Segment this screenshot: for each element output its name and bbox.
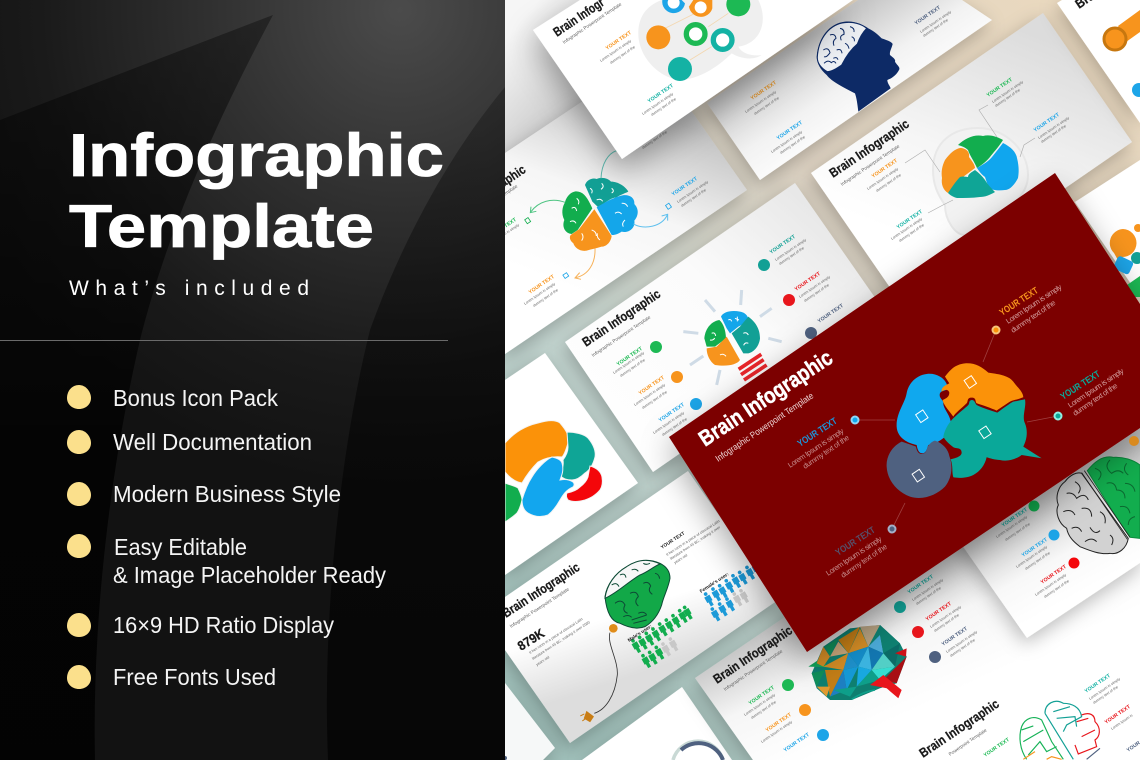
dot: navy bbox=[888, 526, 896, 532]
slide: lightbulb brain: dummy text of the bbox=[641, 390, 668, 410]
slide: puzzle brain in head: Lorem Ipsum is simply bbox=[890, 217, 923, 241]
slide: polygon brain and circuit brain: Infographic Powerpoint Template bbox=[723, 648, 784, 693]
node 02 left bbox=[646, 25, 670, 49]
slide: brain bubble: dummy text of the bbox=[609, 45, 636, 65]
slide: brain bubble: YOUR TEXT bbox=[605, 30, 633, 52]
slide: polygon brain and circuit brain: Lorem Ipsum is simply bbox=[911, 578, 944, 602]
slide: gray and green brain: dummy text of the bbox=[1004, 522, 1031, 542]
subtitle: What’s included bbox=[69, 277, 309, 300]
node top right bbox=[726, 0, 750, 16]
icon: four-piece brain bbox=[942, 135, 1019, 198]
slide: polygon brain and circuit brain: Lorem Ipsum is simply bbox=[1088, 677, 1121, 701]
slide: polygon brain and circuit brain: Lorem Ipsum is bbox=[1110, 713, 1134, 731]
slide: lightbulb brain: YOUR TEXT bbox=[638, 375, 666, 397]
slide: 879K users bbox=[499, 471, 778, 743]
slide: brain bubble bbox=[533, 0, 853, 159]
slide: lightbulb brain: Lorem Ipsum is simply bbox=[612, 351, 645, 375]
backdrop behind slides bbox=[505, 0, 1140, 760]
slide: puzzle brain in head: dummy text of the bbox=[994, 88, 1021, 108]
slide: puzzle brain in head: dummy text of the bbox=[875, 173, 902, 193]
piece: orange bbox=[942, 363, 1023, 417]
piece: navy bbox=[887, 441, 951, 498]
slide: 879K users: Infographic Powerpoint Template bbox=[509, 586, 571, 630]
slide: left/right brain with arrows: dummy text of the bbox=[680, 188, 707, 208]
list item: Bonus Icon Pack: Bonus Icon Pack bbox=[113, 385, 278, 411]
list item: Free Fonts Used: Free Fonts Used bbox=[113, 664, 276, 690]
slide: head silhouette: dummy text of the bbox=[753, 96, 780, 116]
slide: polygon brain and circuit brain: dummy text of the bbox=[1092, 685, 1119, 705]
title: Template bbox=[69, 193, 374, 260]
slide: lightbulb brain: Lorem Ipsum is simply bbox=[798, 275, 831, 299]
slide: puzzle brain in head: Lorem Ipsum is simply bbox=[1037, 116, 1070, 140]
slide: polygon brain and circuit brain: YOUR TEXT bbox=[783, 732, 811, 754]
icon: lightbulb brain bbox=[683, 290, 782, 385]
slide: left/right brain with arrows: dummy text of the bbox=[641, 130, 668, 150]
slide: puzzle brain in head: dummy text of the bbox=[898, 223, 925, 243]
slide: brain bubble: Infographic Powerpoint Template bbox=[562, 1, 623, 46]
node 04 bbox=[713, 31, 732, 49]
slide: head silhouette: Lorem Ipsum is simply bbox=[919, 10, 952, 34]
slide: top right orange bbox=[1057, 0, 1140, 123]
slide: top left blank bbox=[505, 0, 640, 165]
slide: left/right brain with arrows: YOUR TEXT bbox=[528, 274, 556, 296]
slide: lightbulb brain: Lorem Ipsum is simply bbox=[633, 383, 666, 407]
slide: puzzle brain in head: Lorem Ipsum is simply bbox=[866, 167, 899, 191]
slide: puzzle brain in head bbox=[811, 13, 1132, 302]
slide: polygon brain and circuit brain bbox=[695, 505, 1140, 760]
slide: left/right brain with arrows: Infographic Powerpoint Template bbox=[458, 183, 519, 228]
piece: teal bbox=[943, 399, 1042, 478]
icon: circuit brain bbox=[1020, 701, 1100, 759]
panel: red feature slide bbox=[669, 173, 1140, 652]
slide: polygon brain and circuit brain: Lorem Ipsum is simply bbox=[945, 630, 978, 654]
panel: dark sidebar bbox=[0, 0, 505, 760]
list item: Easy Editable: Easy Editable bbox=[114, 534, 247, 560]
slide: puzzle brain in head: Brain Infographic bbox=[826, 116, 912, 180]
slide: bottom left strip bbox=[503, 683, 555, 760]
slide: 879K users: years old bbox=[535, 655, 550, 667]
slide: gray and green brain: Lorem Ipsum is simply bbox=[1015, 545, 1048, 569]
title bbox=[69, 122, 444, 260]
slide: head silhouette: YOUR TEXT bbox=[750, 80, 778, 102]
slide: polygon brain and circuit brain: YOUR TEXT bbox=[941, 626, 969, 648]
slide: 879K users: Brain Infographic bbox=[499, 559, 582, 621]
slide: puzzle brain in head: YOUR TEXT bbox=[896, 209, 924, 231]
slide: polygon brain and circuit brain: YOUR TEXT bbox=[907, 574, 935, 596]
title: Infographic bbox=[69, 122, 444, 189]
slide: brain bubble: YOUR TEXT bbox=[647, 83, 675, 105]
slide: head silhouette: Lorem Ipsum is simply bbox=[744, 90, 777, 114]
slide: head silhouette: dummy text of the bbox=[779, 135, 806, 155]
slide: left/right brain with arrows: Lorem Ipsum is simply bbox=[523, 282, 556, 306]
slide: brain bubble: Lorem Ipsum is simply bbox=[641, 92, 674, 116]
slide: polygon brain and circuit brain: YOUR TEXT bbox=[1104, 704, 1132, 726]
node 05 bottom bbox=[668, 57, 692, 81]
slide: 879K users: literature from 45 BC, making it over 2000 bbox=[531, 620, 591, 661]
slide: head silhouette bbox=[707, 0, 992, 180]
arrow: blue bbox=[633, 214, 668, 227]
icon: coloured brain lobes bbox=[505, 421, 602, 522]
slide: left/right brain with arrows bbox=[445, 55, 747, 354]
icon: navy head with brain bbox=[817, 22, 899, 112]
node 03 bbox=[686, 25, 705, 43]
arrow: orange bbox=[575, 248, 595, 279]
slide: lightbulb brain: Infographic Powerpoint Template bbox=[591, 314, 652, 359]
slide: left/right brain with arrows: Lorem Ipsum is simply bbox=[487, 223, 520, 247]
slide: brain bubble: dummy text of the bbox=[650, 97, 677, 117]
slide: polygon brain and circuit brain: YOUR TEXT bbox=[765, 712, 793, 734]
slide: gray and green brain: YOUR TEXT bbox=[1021, 537, 1049, 559]
icon: male users bbox=[629, 604, 694, 669]
slide: lightbulb brain: Brain Infographic bbox=[579, 286, 663, 349]
slide: gray and green brain: YOUR TEXT bbox=[1001, 507, 1029, 529]
slide: puzzle brain in head: YOUR TEXT bbox=[986, 77, 1014, 99]
pale head outline bbox=[933, 128, 1028, 235]
slide: polygon brain and circuit brain: dummy text of the bbox=[915, 586, 942, 606]
icon: female users bbox=[702, 560, 762, 622]
slide: 879K users: years old bbox=[673, 553, 688, 565]
slide: lightbulb brain: YOUR TEXT bbox=[769, 234, 797, 256]
slide: gray and green brain: YOUR TEXT bbox=[1040, 564, 1068, 586]
icon: four-colour brain bbox=[525, 151, 671, 279]
label: blue: Lorem Ipsum is simply bbox=[786, 426, 846, 470]
icon: half-filled brain and plug bbox=[580, 560, 670, 722]
slide: gray and green brain: Lorem Ipsum is simply bbox=[1034, 573, 1067, 597]
slide: gray and green brain: dummy text of the bbox=[1024, 551, 1051, 571]
slide: lightbulb brain: YOUR TEXT bbox=[658, 402, 686, 424]
slide: puzzle brain in head: Infographic Powerpoint Template bbox=[840, 143, 901, 188]
bubble cloud bbox=[638, 0, 763, 80]
slide: left/right brain with arrows: YOUR TEXT bbox=[490, 217, 518, 239]
slide: lightbulb brain: YOUR TEXT bbox=[794, 271, 822, 293]
icon: low-poly brain bbox=[808, 625, 907, 700]
arrow: green bbox=[530, 200, 565, 213]
slide: left/right brain with arrows: Brain Infographic bbox=[445, 162, 528, 224]
list item: Easy Editable bbox=[67, 534, 386, 588]
list item: Modern Business Style: Modern Business Style bbox=[113, 481, 341, 507]
slide: head silhouette: YOUR TEXT bbox=[776, 120, 804, 142]
slide: brain bubble: Lorem Ipsum is simply bbox=[599, 39, 632, 63]
puzzle brain bbox=[887, 363, 1042, 498]
icon: half green half outline brain bbox=[1057, 457, 1140, 554]
label: navy: YOUR TEXT bbox=[834, 525, 878, 559]
slide: lightbulb brain: dummy text of the bbox=[661, 417, 688, 437]
slide: gray and green brain: dummy text of the bbox=[1043, 579, 1070, 599]
slide: colored brain bbox=[505, 353, 638, 575]
label: blue: YOUR TEXT bbox=[796, 416, 840, 450]
slide: polygon brain and circuit brain: Lorem Ipsum is simply bbox=[929, 605, 962, 629]
slide: 879K users: It has roots in a piece of classical Latin bbox=[528, 617, 583, 655]
arrow: teal bbox=[601, 151, 617, 178]
slide: head silhouette: Lorem Ipsum is simply bbox=[770, 130, 803, 154]
connector lines bbox=[855, 330, 1058, 529]
slide: gray and green brain: Lorem Ipsum is simply bbox=[995, 515, 1028, 539]
slide: 879K users: Male's user: bbox=[627, 623, 654, 644]
slide: puzzle brain in head: dummy text of the bbox=[1040, 124, 1067, 144]
slide: 879K users: YOUR TEXT bbox=[660, 531, 686, 551]
slide: 879K users: 879K bbox=[515, 625, 548, 654]
slide: puzzle brain in head: YOUR TEXT bbox=[871, 158, 899, 180]
dot: orange bbox=[992, 326, 1000, 334]
label: orange: YOUR TEXT bbox=[998, 285, 1041, 319]
slide: head silhouette: dummy text of the bbox=[922, 18, 949, 38]
title: Brain Infographic: Brain Infographic bbox=[694, 345, 837, 451]
label: teal: YOUR TEXT bbox=[1059, 369, 1103, 403]
piece: blue bbox=[897, 374, 951, 453]
slide: lightbulb brain: Lorem Ipsum is simply bbox=[774, 238, 807, 262]
label: orange: Lorem Ipsum is simply bbox=[1004, 282, 1064, 326]
slide: 879K users: It has roots in a piece of classical Latin bbox=[665, 519, 720, 557]
dot: teal bbox=[1054, 412, 1062, 420]
subtitle: Infographic Powerpoint Template bbox=[714, 391, 815, 464]
slide: head silhouette: YOUR TEXT bbox=[914, 5, 942, 27]
icons on pieces bbox=[912, 376, 991, 482]
divider bbox=[0, 340, 448, 341]
slide: puzzle brain in head: Lorem Ipsum is simply bbox=[991, 80, 1024, 104]
slide: polygon brain and circuit brain: YOUR TEXT bbox=[983, 737, 1011, 759]
slide: polygon brain and circuit brain: Lorem Ipsum is simply bbox=[760, 720, 793, 744]
label: teal: dummy text of the bbox=[1071, 381, 1119, 418]
slide: 879K users: Female's user: bbox=[699, 571, 730, 595]
slide: bottom ring bbox=[582, 687, 732, 760]
label: orange: dummy text of the bbox=[1009, 298, 1057, 335]
label: navy: dummy text of the bbox=[839, 542, 889, 580]
list item: Easy Editable: & Image Placeholder Ready bbox=[113, 562, 386, 588]
label: teal: Lorem Ipsum is simply bbox=[1066, 366, 1126, 410]
slide: lightbulb brain: Lorem Ipsum is simply bbox=[652, 411, 685, 435]
slide: puzzle brain in head: YOUR TEXT bbox=[1033, 112, 1061, 134]
label: blue: dummy text of the bbox=[801, 433, 851, 471]
slide: polygon brain and circuit brain: Lorem Ipsum is simply bbox=[743, 693, 776, 717]
slide: lightbulb brain: dummy text of the bbox=[619, 358, 646, 378]
connector lines bbox=[905, 105, 1035, 213]
slide: polygon brain and circuit brain: YOUR TEXT bbox=[748, 685, 776, 707]
slide: left/right brain with arrows: YOUR TEXT bbox=[671, 176, 699, 198]
slide: lightbulb brain: dummy text of the bbox=[803, 283, 830, 303]
slide: polygon brain and circuit brain: dummy text of the bbox=[933, 613, 960, 633]
slide: polygon brain and circuit brain: dummy text of the bbox=[949, 638, 976, 658]
slide: polygon brain and circuit brain: YOUR TEXT bbox=[1084, 673, 1112, 695]
dot: blue bbox=[852, 416, 858, 424]
slide: 879K users: literature from 45 BC, making it over bbox=[669, 525, 722, 561]
list item: 16x9: 16×9 HD Ratio Display bbox=[113, 612, 334, 638]
slide: left/right brain with arrows: Lorem Ipsum is simply bbox=[676, 180, 709, 204]
slide: lightbulb brain: YOUR TEXT bbox=[616, 346, 644, 368]
node 01 bbox=[662, 0, 685, 13]
slide: lightbulb brain: YOUR TEXT bbox=[817, 303, 845, 325]
slide: polygon brain and circuit brain: YOUR TEXT bbox=[925, 601, 953, 623]
list item: Well Documentation: Well Documentation bbox=[113, 429, 312, 455]
slide: left/right brain with arrows: dummy text of the bbox=[532, 288, 559, 308]
slide: gray and green brain bbox=[925, 345, 1140, 638]
slide: polygon brain and circuit brain: Powerpoint Template bbox=[948, 727, 988, 758]
slide: lightbulb brain bbox=[565, 183, 885, 472]
node 02 bbox=[689, 0, 712, 17]
label: navy: Lorem Ipsum is simply bbox=[824, 534, 884, 578]
slide: polygon brain and circuit brain: Brain Infographic bbox=[710, 623, 795, 686]
slide: right icons bbox=[1075, 160, 1140, 297]
slide: polygon brain and circuit brain: Brain Infographic bbox=[916, 696, 1002, 760]
slide: lightbulb brain: dummy text of the bbox=[778, 246, 805, 266]
slide: polygon brain and circuit brain: dummy text of the bbox=[750, 700, 777, 720]
